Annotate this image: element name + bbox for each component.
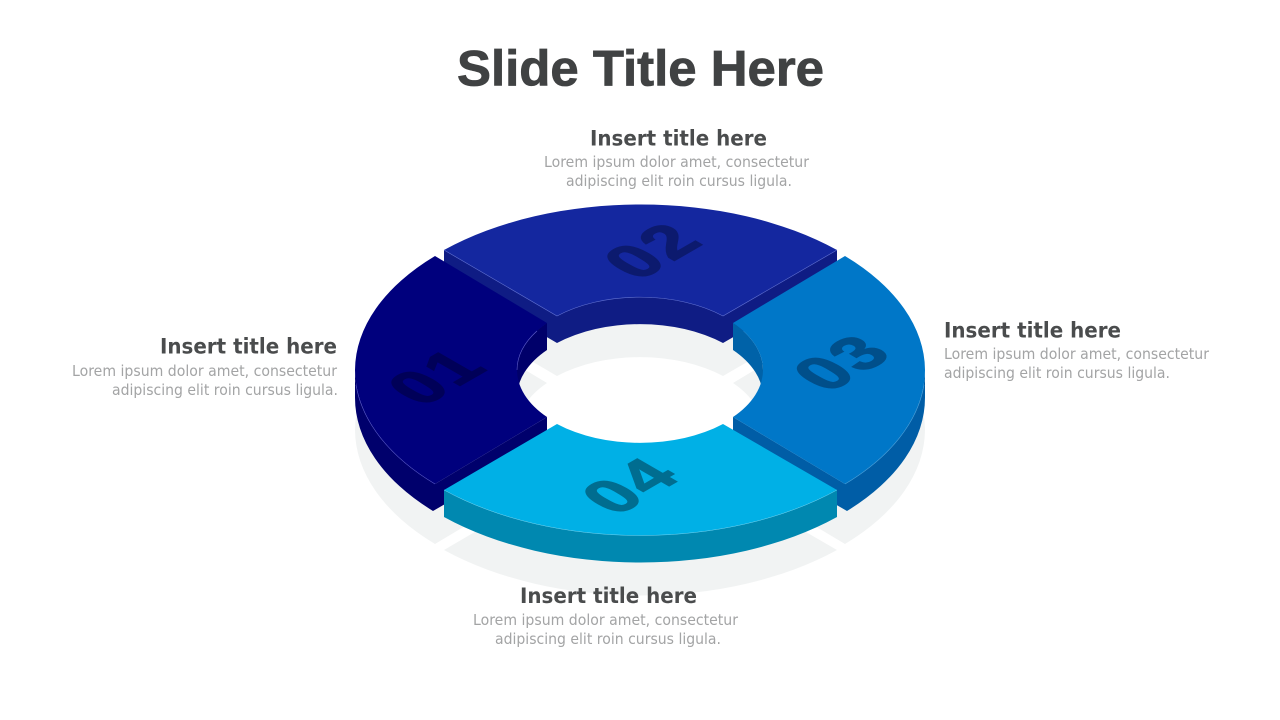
- title: Slide Title Here: [457, 40, 824, 96]
- segment 02: [444, 205, 837, 343]
- segment 04: [444, 424, 837, 562]
- label: left (01): Lorem ipsum dolor amet, consectetur: [72, 362, 338, 380]
- label: left (01): Insert title here: [160, 334, 337, 358]
- label: left (01): adipiscing elit roin cursus ligula.: [112, 381, 338, 399]
- label: right (03): Insert title here: [944, 318, 1121, 342]
- label: right (03): adipiscing elit roin cursus ligula.: [944, 364, 1170, 382]
- label: top (02): Insert title here: [590, 126, 767, 150]
- ground shadow of the ring: [355, 265, 925, 595]
- label: top (02): [544, 126, 810, 190]
- segment 03: [733, 256, 925, 511]
- segment 01: [355, 256, 547, 511]
- number 03: 03: [776, 324, 908, 401]
- number 01: 01: [370, 338, 503, 415]
- label: right (03): Lorem ipsum dolor amet, consectetur: [944, 345, 1210, 363]
- number 04: 04: [564, 447, 697, 524]
- label: right (03): [944, 318, 1210, 382]
- label: bottom (04): [473, 584, 739, 648]
- label: bottom (04): Lorem ipsum dolor amet, consectetur: [473, 611, 739, 629]
- label: top (02): Lorem ipsum dolor amet, consectetur: [544, 153, 810, 171]
- label: top (02): adipiscing elit roin cursus ligula.: [566, 172, 792, 190]
- label: bottom (04): Insert title here: [520, 584, 697, 608]
- number 02: 02: [586, 212, 719, 289]
- label: bottom (04): adipiscing elit roin cursus ligula.: [495, 630, 721, 648]
- label: left (01): [72, 334, 338, 399]
